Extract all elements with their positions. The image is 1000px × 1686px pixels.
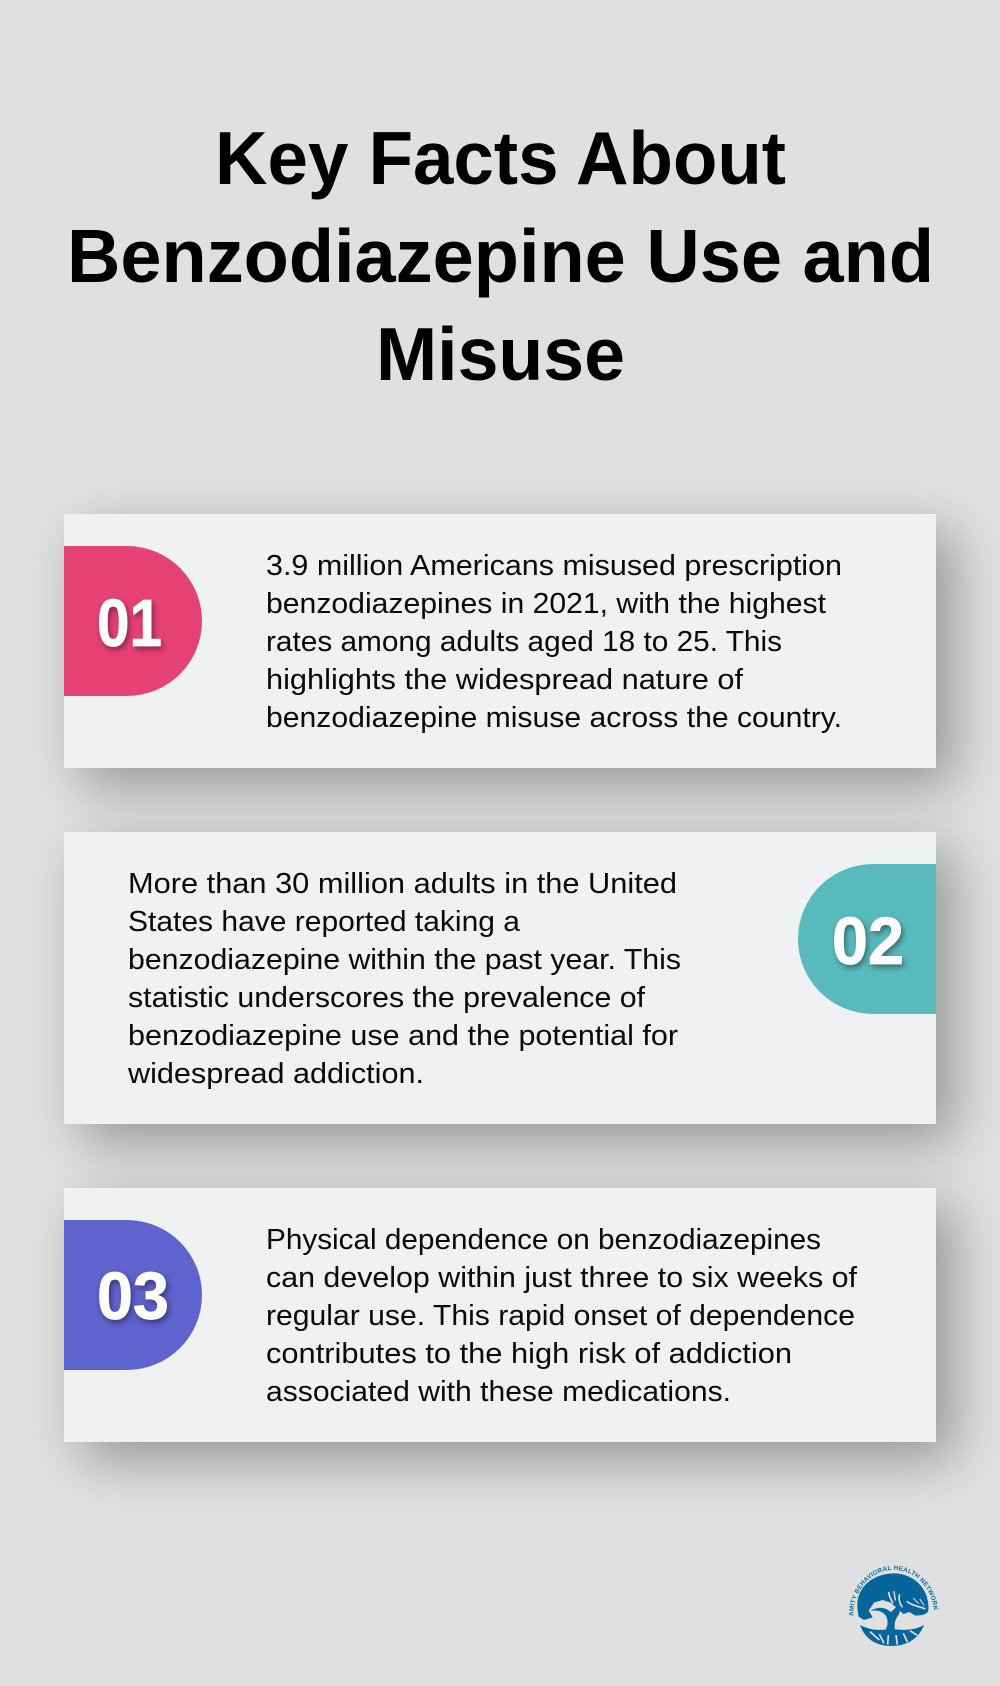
text: fact 03: can develop within just three to six weeks of (266, 1262, 857, 1294)
title (67, 120, 934, 396)
icon: Amity Behavioral Health Network logo (848, 1565, 938, 1646)
text: fact 03 (266, 1224, 857, 1408)
text: fact 01: benzodiazepines in 2021, with the highest (266, 588, 826, 620)
text: fact 03: regular use. This rapid onset of dependence (266, 1300, 855, 1332)
logo wordmark: AMITY BEHAVIORAL HEALTH NETWORK (848, 1565, 938, 1616)
badge: 02 (798, 864, 936, 1014)
tree branches (889, 1592, 925, 1609)
panel: fact 02 (64, 832, 936, 1124)
tree trunk (870, 1602, 900, 1635)
panel: fact 03 (64, 1188, 936, 1442)
text: fact 01: highlights the widespread nature of (266, 664, 743, 696)
text: fact 02: benzodiazepine use and the potential for (128, 1020, 679, 1052)
badge: 01 (64, 546, 202, 696)
text: fact 02: States have reported taking a (128, 906, 520, 938)
tree roots (860, 1625, 924, 1646)
title: Benzodiazepine Use and (67, 214, 934, 298)
text: fact 02: widespread addiction. (127, 1058, 424, 1090)
tree crown (857, 1573, 928, 1620)
text: fact 02: benzodiazepine within the past year. This (128, 944, 681, 976)
text: fact 02 (127, 868, 681, 1090)
text: fact 03: associated with these medications. (266, 1376, 731, 1408)
panel: fact 01 (64, 514, 936, 768)
number 01: 01 (97, 586, 162, 661)
text: fact 01: rates among adults aged 18 to 25. This (266, 626, 782, 658)
number 02: 02 (832, 904, 904, 979)
text: fact 01: benzodiazepine misuse across the country. (266, 702, 842, 734)
text: fact 02: statistic underscores the prevalence of (128, 982, 645, 1014)
text: fact 03: Physical dependence on benzodiazepines (266, 1224, 821, 1256)
number 03: 03 (97, 1259, 169, 1334)
text: fact 01: 3.9 million Americans misused prescription (266, 550, 842, 582)
title: Misuse (376, 312, 625, 396)
text: fact 01 (266, 550, 842, 734)
badge: 03 (64, 1220, 202, 1370)
text: fact 02: More than 30 million adults in the United (128, 868, 677, 900)
text: fact 03: contributes to the high risk of addiction (266, 1338, 792, 1370)
